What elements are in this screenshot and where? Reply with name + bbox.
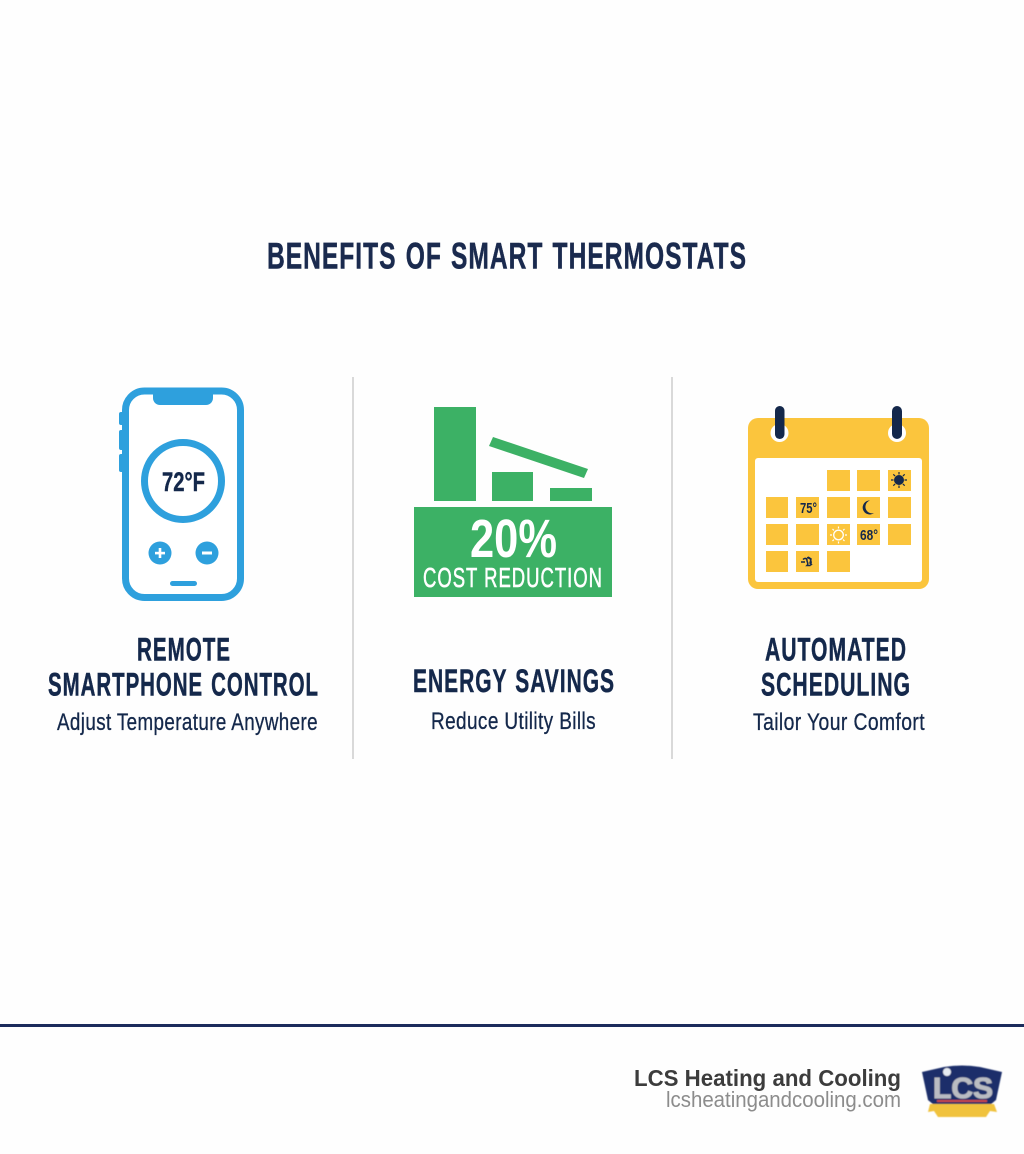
panel text: automated scheduling: Tailor Your Comfort <box>753 709 925 736</box>
logo: LCS badge: LCS <box>933 1073 993 1105</box>
panel text: remote smartphone control: REMOTE <box>137 632 231 668</box>
panel text: energy savings <box>413 663 615 735</box>
icon: smartphone with thermostat <box>119 390 240 598</box>
panel text: energy savings: ENERGY SAVINGS <box>413 663 615 699</box>
footer brand text: LCS Heating and Cooling <box>634 1065 901 1091</box>
panel text: remote smartphone control: SMARTPHONE CONTROL <box>48 666 319 702</box>
icon: schedule calendar: 75° <box>800 500 817 517</box>
panel text: remote smartphone control <box>48 632 319 736</box>
panel text: automated scheduling: SCHEDULING <box>761 666 911 702</box>
footer brand text <box>634 1065 901 1112</box>
footer rule <box>0 1024 1024 1027</box>
panel text: remote smartphone control: Adjust Temperature Anywhere <box>57 709 318 736</box>
panel text: automated scheduling: AUTOMATED <box>765 632 907 668</box>
icon: schedule calendar: 68° <box>860 527 878 544</box>
icon: smartphone with thermostat: 72°F <box>162 467 205 497</box>
panel text: energy savings: Reduce Utility Bills <box>431 708 596 735</box>
icon: falling bars with cost reduction badge: COST REDUCTION <box>423 562 603 593</box>
icon: falling bars with cost reduction badge: 20% <box>470 509 557 569</box>
title: BENEFITS OF SMART THERMOSTATS <box>267 236 747 276</box>
footer brand text: lcsheatingandcooling.com <box>666 1087 901 1112</box>
logo: LCS badge <box>922 1066 1002 1117</box>
icon: falling bars with cost reduction badge <box>414 407 612 597</box>
icon: schedule calendar <box>748 406 929 589</box>
panel text: automated scheduling <box>753 632 925 736</box>
